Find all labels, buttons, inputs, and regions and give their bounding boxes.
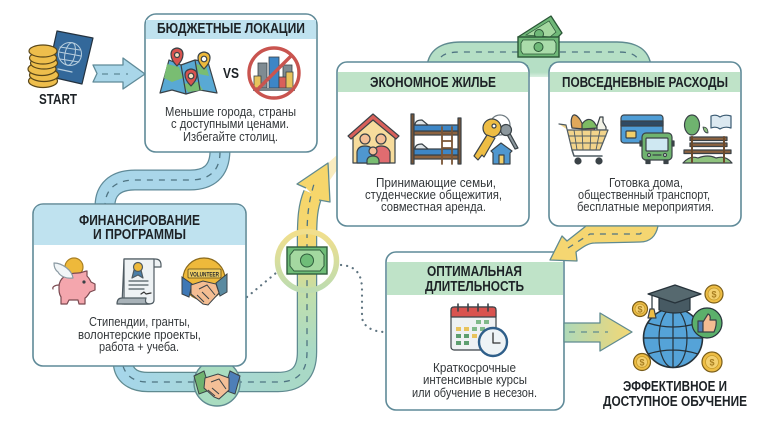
icon: keys and small house: [474, 115, 518, 164]
road: budget locations to funding: [105, 150, 220, 206]
coins: [632, 285, 723, 372]
panel: funding and programs: [33, 204, 246, 366]
text block: [365, 175, 502, 214]
icon: house with family: [348, 114, 399, 164]
coins: $: [638, 304, 643, 314]
heading: result: [603, 379, 747, 410]
label: START: START: [39, 92, 77, 108]
panel: budget locations: [145, 14, 317, 152]
coin stack: [28, 45, 58, 88]
panel: affordable housing: [337, 62, 529, 226]
icon: transit card and bus: [621, 115, 674, 164]
badge text: VOLUNTEER: [190, 272, 220, 278]
heading: ЭКОНОМНОЕ ЖИЛЬЕ: [370, 75, 496, 91]
text block: совместная аренда.: [381, 199, 486, 214]
text block: или обучение в несезон.: [412, 385, 537, 400]
text block: общественный транспорт,: [578, 187, 710, 202]
text block: Меньшие города, страны: [165, 104, 296, 119]
icon: certificate scroll: [117, 259, 161, 304]
label: VS: VS: [223, 66, 239, 82]
text block: студенческие общежития,: [365, 187, 502, 202]
icon: park bench, tree and book: [683, 115, 732, 163]
text block: Стипендии, гранты,: [89, 314, 190, 329]
icon: bunk bed: [411, 114, 461, 164]
heading: ФИНАНСИРОВАНИЕ: [79, 213, 200, 229]
icon: handshake medallion on road: [194, 360, 240, 406]
text block: интенсивные курсы: [423, 372, 527, 387]
text block: волонтерские проекты,: [78, 327, 201, 342]
heading: БЮДЖЕТНЫЕ ЛОКАЦИИ: [157, 21, 305, 37]
text block: Готовка дома,: [609, 175, 683, 190]
text block: [577, 175, 714, 214]
text block: Принимающие семьи,: [376, 175, 496, 190]
globe: [644, 308, 702, 368]
heading: ДЛИТЕЛЬНОСТЬ: [425, 279, 524, 295]
panel: daily expenses: [549, 62, 741, 226]
arrow: daily expenses to duration: [550, 226, 658, 261]
passport: [47, 31, 93, 84]
icon: banknotes on top road: [518, 16, 562, 57]
text block: [165, 104, 296, 144]
text block: работа + учеба.: [99, 339, 179, 354]
graduation cap: [648, 285, 701, 318]
icon: grocery cart: [559, 115, 608, 164]
heading: [425, 264, 524, 295]
dotted connector: medallion to duration: [341, 265, 386, 332]
text block: Краткосрочные: [433, 360, 516, 375]
coins: $: [710, 358, 715, 368]
icon: crossed out city: [249, 48, 299, 98]
icon: piggy bank with wing: [53, 258, 95, 304]
arrow: start to budget locations: [93, 58, 145, 89]
heading: ОПТИМАЛЬНАЯ: [427, 264, 522, 280]
icon: globe with graduation cap and coins: [632, 285, 723, 372]
arrow: duration to result: [564, 313, 632, 351]
road: housing to daily expenses: [427, 42, 651, 77]
text block: [412, 360, 537, 400]
road: funding to housing: [123, 155, 337, 382]
heading: result: ЭФФЕКТИВНОЕ И: [623, 379, 727, 395]
icon: calendar and clock: [451, 304, 507, 356]
heading: И ПРОГРАММЫ: [93, 227, 186, 243]
text block: Избегайте столиц.: [183, 129, 278, 144]
thumbs up badge: [692, 308, 722, 338]
medallion: money on the road: [278, 232, 336, 290]
icon: coins and passport: [28, 31, 93, 88]
dotted connector: funding to medallion: [247, 273, 276, 297]
icon: map with pins: [160, 48, 217, 94]
coins: $: [712, 290, 717, 300]
heading: [79, 213, 200, 243]
text block: с доступными ценами.: [171, 116, 289, 131]
text block: бесплатные мероприятия.: [577, 199, 714, 214]
icon: volunteer badge with handshake: [182, 258, 227, 305]
coins: $: [640, 358, 645, 368]
text block: [78, 314, 201, 354]
panel: optimal duration: [386, 252, 564, 410]
